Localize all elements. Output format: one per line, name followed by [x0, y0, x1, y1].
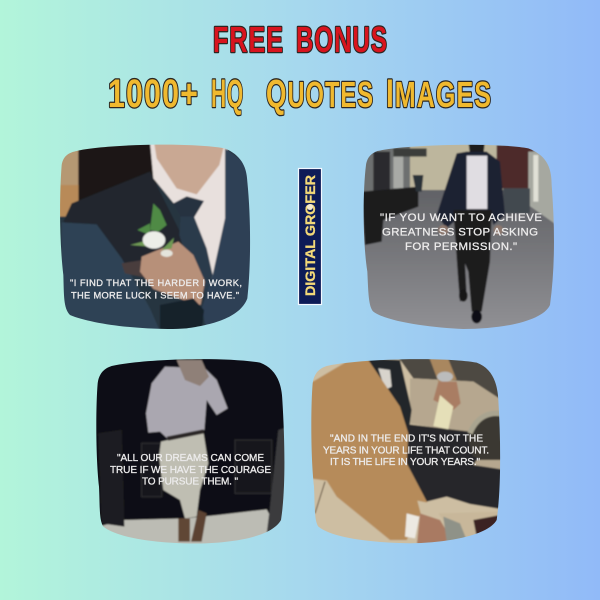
quote text — [70, 278, 242, 300]
quote text — [380, 212, 542, 253]
photo: man in shirt against dark door — [96, 359, 284, 544]
photo: groom with boutonniere — [60, 144, 250, 329]
logo: digital grofer: DIGITAL GROFER — [302, 175, 318, 296]
quote text: FOR PERMISSION." — [405, 241, 517, 253]
quote text: IT IS THE LIFE IN YOUR YEARS." — [330, 457, 480, 468]
panel: car interior quote card — [311, 359, 500, 544]
logo: digital grofer — [298, 168, 322, 304]
panel: groom quote card — [60, 144, 250, 329]
subtitle: 1000+ HQ Quotes Images — [108, 72, 492, 116]
subtitle: 1000+ HQ Quotes Images: 1000+ — [108, 72, 199, 116]
quote text: "IF YOU WANT TO ACHIEVE — [380, 212, 542, 224]
quote text — [110, 453, 271, 488]
quote text: "ALL OUR DREAMS CAN COME — [117, 453, 264, 464]
title: free bonus: BONUS — [296, 19, 388, 60]
quote text: TRUE IF WE HAVE THE COURAGE — [110, 465, 271, 476]
quote text: "AND IN THE END IT'S NOT THE — [330, 434, 483, 444]
subtitle: 1000+ HQ Quotes Images: HQ — [211, 72, 244, 116]
quote text: "I FIND THAT THE HARDER I WORK, — [70, 278, 242, 288]
subtitle: 1000+ HQ Quotes Images: QUOTES — [266, 72, 374, 116]
title: free bonus: FREE — [213, 19, 284, 60]
quote text: THE MORE LUCK I SEEM TO HAVE." — [71, 290, 239, 300]
photo: man in tan coat inside car — [311, 359, 500, 544]
panel: dreams quote card — [96, 359, 284, 544]
quote text: GREATNESS STOP ASKING — [382, 226, 538, 238]
quote text: TO PURSUE THEM. " — [142, 476, 238, 488]
subtitle: 1000+ HQ Quotes Images: IMAGES — [386, 72, 492, 116]
photo: man in suit walking on street — [364, 144, 554, 329]
panel: street walk quote card — [364, 144, 554, 329]
quote text — [323, 434, 489, 468]
quote text: YEARS IN YOUR LIFE THAT COUNT. — [323, 446, 489, 456]
title: free bonus — [213, 19, 388, 60]
